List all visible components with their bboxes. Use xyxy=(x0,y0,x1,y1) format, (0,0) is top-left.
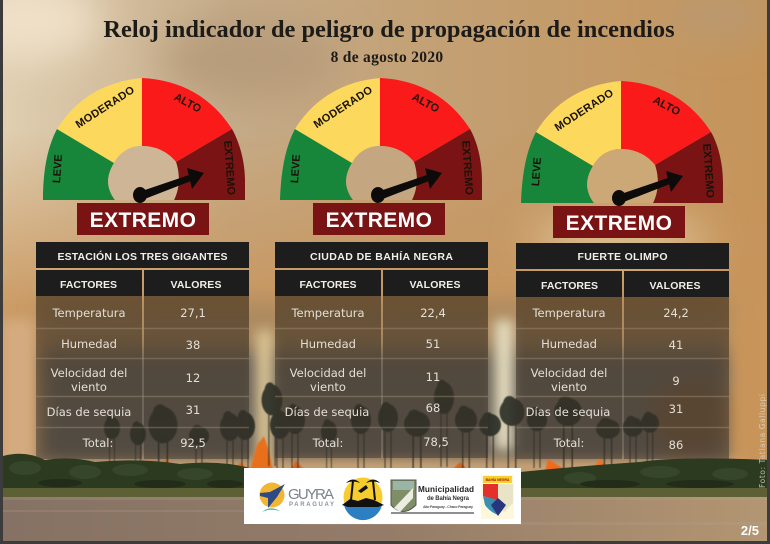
label: leve: LEVE xyxy=(530,157,544,187)
table: Estación Los Tres Gigantes: ESTACIÓN LOS TRES GIGANTES xyxy=(58,250,228,263)
label: alto: ALTO xyxy=(651,94,682,119)
needle xyxy=(371,168,442,203)
label: leve: LEVE xyxy=(51,154,65,184)
hub xyxy=(587,149,658,203)
table: Fuerte Olimpo: 86 xyxy=(669,438,683,452)
logo: coat of arms xyxy=(481,475,514,519)
needle xyxy=(133,168,204,203)
label: alto: ALTO xyxy=(172,91,203,116)
table: Ciudad de Bahía Negra xyxy=(275,242,488,458)
sector: moderado xyxy=(536,81,621,166)
table: Ciudad de Bahía Negra: 78,5 xyxy=(423,435,449,449)
table: Ciudad de Bahía Negra: Velocidad del xyxy=(290,366,366,380)
background: shoreline vegetation and water xyxy=(0,454,770,544)
label: extremo: EXTREMO xyxy=(700,143,716,199)
table: Ciudad de Bahía Negra: Humedad xyxy=(300,337,356,351)
table: Fuerte Olimpo: 24,2 xyxy=(663,306,689,320)
table: Estación Los Tres Gigantes: 92,5 xyxy=(180,436,206,450)
sector: leve xyxy=(43,129,115,200)
label: moderado: MODERADO xyxy=(312,84,375,131)
table: Fuerte Olimpo: 31 xyxy=(669,402,683,416)
risk label: extremo 2: EXTREMO xyxy=(326,209,432,232)
table: Fuerte Olimpo: 41 xyxy=(669,338,683,352)
table: Estación Los Tres Gigantes: 38 xyxy=(186,338,200,352)
sector: alto xyxy=(142,78,232,162)
table: Fuerte Olimpo: FUERTE OLIMPO xyxy=(578,251,668,263)
table: Estación Los Tres Gigantes: viento xyxy=(71,380,107,394)
table: Estación Los Tres Gigantes: 12 xyxy=(186,371,200,385)
logo: Guyra Paraguay xyxy=(260,482,334,512)
photo credit: Foto: Tatiana Galluppi xyxy=(758,394,767,488)
risk label: extremo 1: EXTREMO xyxy=(90,209,196,232)
label: extremo: EXTREMO xyxy=(221,140,237,196)
gauge: Estación Los Tres Gigantes xyxy=(43,78,245,203)
table: Fuerte Olimpo: Temperatura xyxy=(531,306,606,320)
sector: alto xyxy=(621,81,711,165)
logo: Bahía Negra palms xyxy=(342,478,384,520)
table: Ciudad de Bahía Negra: 68 xyxy=(426,401,440,415)
label: extremo: EXTREMO xyxy=(459,140,475,196)
table: Fuerte Olimpo xyxy=(516,243,729,459)
hub xyxy=(346,146,417,200)
table: Estación Los Tres Gigantes: 31 xyxy=(186,403,200,417)
gauge: Fuerte Olimpo xyxy=(521,81,723,206)
table: Fuerte Olimpo: viento xyxy=(551,380,587,394)
table: Ciudad de Bahía Negra: CIUDAD DE BAHÍA NEGRA xyxy=(310,250,453,263)
logo: Municipalidad de Bahía Negra: Municipalidad xyxy=(418,485,474,494)
table: Fuerte Olimpo: Total: xyxy=(553,436,584,450)
logo: coat of arms: BAHÍA NEGRA xyxy=(486,477,510,482)
sector: extremo xyxy=(653,132,723,203)
table: Fuerte Olimpo: Humedad xyxy=(541,337,597,351)
table: Estación Los Tres Gigantes: Humedad xyxy=(61,337,117,351)
risk label: extremo 3: EXTREMO xyxy=(566,212,672,235)
table: Ciudad de Bahía Negra: Días de sequia xyxy=(285,405,369,419)
table: Ciudad de Bahía Negra: VALORES xyxy=(410,279,460,291)
sector: moderado xyxy=(295,78,380,163)
table: Ciudad de Bahía Negra: FACTORES xyxy=(300,279,356,291)
table: Fuerte Olimpo: FACTORES xyxy=(541,280,598,292)
gauge: Ciudad de Bahía Negra xyxy=(280,78,482,203)
pale gaps between the tables xyxy=(2,320,768,472)
label: alto: ALTO xyxy=(410,91,441,116)
table: Estación Los Tres Gigantes: VALORES xyxy=(170,279,222,291)
risk label: extremo 2 xyxy=(313,203,445,235)
table: Estación Los Tres Gigantes xyxy=(36,242,249,459)
logo: Municipalidad de Bahía Negra: de Bahía Negra xyxy=(427,496,470,502)
needle xyxy=(612,171,683,206)
table: Ciudad de Bahía Negra: 22,4 xyxy=(420,306,446,320)
label: leve: LEVE xyxy=(289,154,303,184)
sector: extremo xyxy=(174,129,245,200)
background: palm trees xyxy=(104,380,659,503)
label: moderado: MODERADO xyxy=(74,84,137,131)
table: Estación Los Tres Gigantes: Temperatura xyxy=(51,306,126,320)
table: Ciudad de Bahía Negra: 11 xyxy=(426,370,440,384)
hub xyxy=(108,146,179,200)
table: Estación Los Tres Gigantes: Días de sequia xyxy=(47,405,131,419)
background: fire flames xyxy=(144,436,646,476)
table: Estación Los Tres Gigantes: Total: xyxy=(82,436,113,450)
risk label: extremo 1 xyxy=(77,203,209,235)
logo panel xyxy=(244,468,521,524)
sector: leve xyxy=(280,129,353,200)
table: Estación Los Tres Gigantes: 27,1 xyxy=(180,306,206,320)
table: Ciudad de Bahía Negra: 51 xyxy=(426,337,440,351)
label: moderado: MODERADO xyxy=(553,87,616,134)
table: Estación Los Tres Gigantes: Velocidad del xyxy=(51,366,127,380)
table: Fuerte Olimpo: VALORES xyxy=(650,280,700,292)
page number: 2/5 xyxy=(741,523,759,538)
table: Ciudad de Bahía Negra: Temperatura xyxy=(290,306,365,320)
logo: Municipalidad de Bahía Negra xyxy=(391,480,474,514)
title: Reloj indicador de peligro de propagación de incendios xyxy=(103,16,675,43)
logo: Guyra Paraguay: GUYRA xyxy=(288,486,334,503)
table: Fuerte Olimpo: Días de sequia xyxy=(526,405,610,419)
smoke behind the tables xyxy=(40,300,730,465)
table: Fuerte Olimpo: 9 xyxy=(672,374,680,388)
sector: moderado xyxy=(57,78,142,163)
table: Fuerte Olimpo: Velocidad del xyxy=(531,366,607,380)
sector: extremo xyxy=(412,129,482,200)
logo: Guyra Paraguay: PARAGUAY xyxy=(289,502,334,508)
date subtitle: 8 de agosto 2020 xyxy=(331,49,443,66)
table: Ciudad de Bahía Negra: viento xyxy=(310,380,346,394)
sector: alto xyxy=(380,78,470,162)
sector: leve xyxy=(521,132,594,203)
table: Ciudad de Bahía Negra: Total: xyxy=(312,436,343,450)
risk label: extremo 3 xyxy=(553,206,685,238)
table: Estación Los Tres Gigantes: FACTORES xyxy=(60,279,117,291)
logo: Municipalidad de Bahía Negra: Alto Paraguay - Chaco Paraguay xyxy=(423,505,473,509)
